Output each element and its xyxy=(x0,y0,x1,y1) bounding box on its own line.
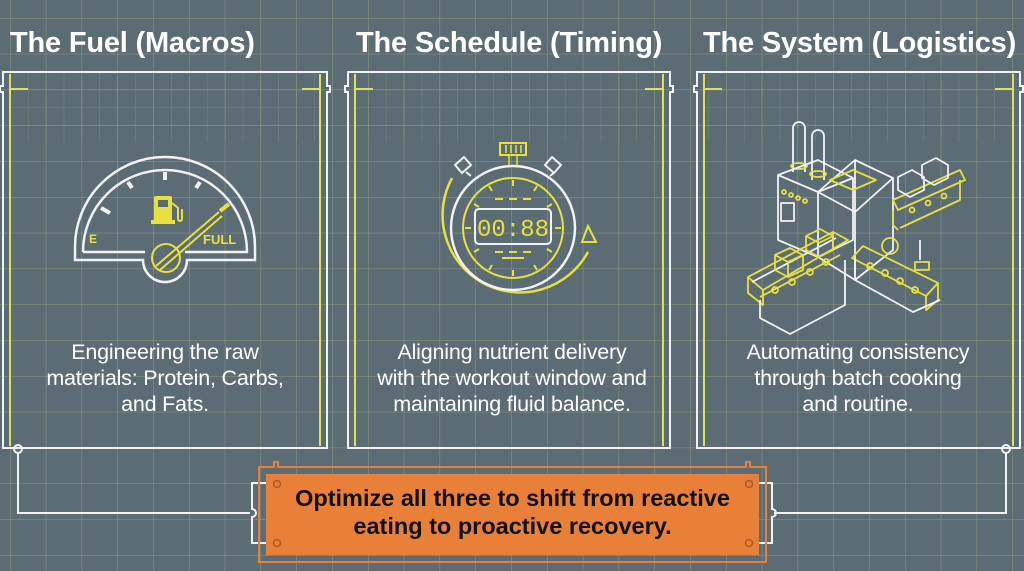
text: fuel description: Engineering the raw xyxy=(71,340,259,364)
title: schedule: The Schedule (Timing) xyxy=(356,27,662,59)
text: system description: through batch cooking xyxy=(754,366,962,390)
text: schedule description: Aligning nutrient delivery xyxy=(397,340,627,364)
text: schedule description xyxy=(377,340,647,416)
callout text: eating to proactive recovery. xyxy=(353,513,672,539)
text: fuel description: materials: Protein, Carbs, xyxy=(46,366,284,390)
text: schedule description: maintaining fluid balance. xyxy=(393,392,631,416)
icon: fuel gauge: FULL xyxy=(203,232,236,247)
icon: factory xyxy=(748,122,965,334)
panel: fuel xyxy=(0,72,330,448)
text: schedule description: with the workout window and xyxy=(377,366,647,390)
panel: schedule xyxy=(345,72,673,448)
callout text: Optimize all three to shift from reactive xyxy=(295,485,730,511)
icon: stopwatch: 00:88 xyxy=(477,217,549,244)
text: fuel description: and Fats. xyxy=(121,392,209,416)
text: system description: Automating consistency xyxy=(747,340,969,364)
icon: fuel gauge xyxy=(75,157,255,282)
text: system description xyxy=(746,340,970,416)
connector: right xyxy=(752,445,1010,543)
text: fuel description xyxy=(46,340,284,416)
panel: system xyxy=(694,72,1023,448)
connector: left xyxy=(14,445,274,543)
icon: stopwatch xyxy=(443,143,596,292)
title: system: The System (Logistics) xyxy=(703,27,1016,59)
title: fuel: The Fuel (Macros) xyxy=(10,27,255,59)
callout text xyxy=(295,485,730,539)
text: system description: and routine. xyxy=(802,392,914,416)
callout box frame xyxy=(259,462,766,562)
icon: fuel gauge: E xyxy=(89,232,97,246)
